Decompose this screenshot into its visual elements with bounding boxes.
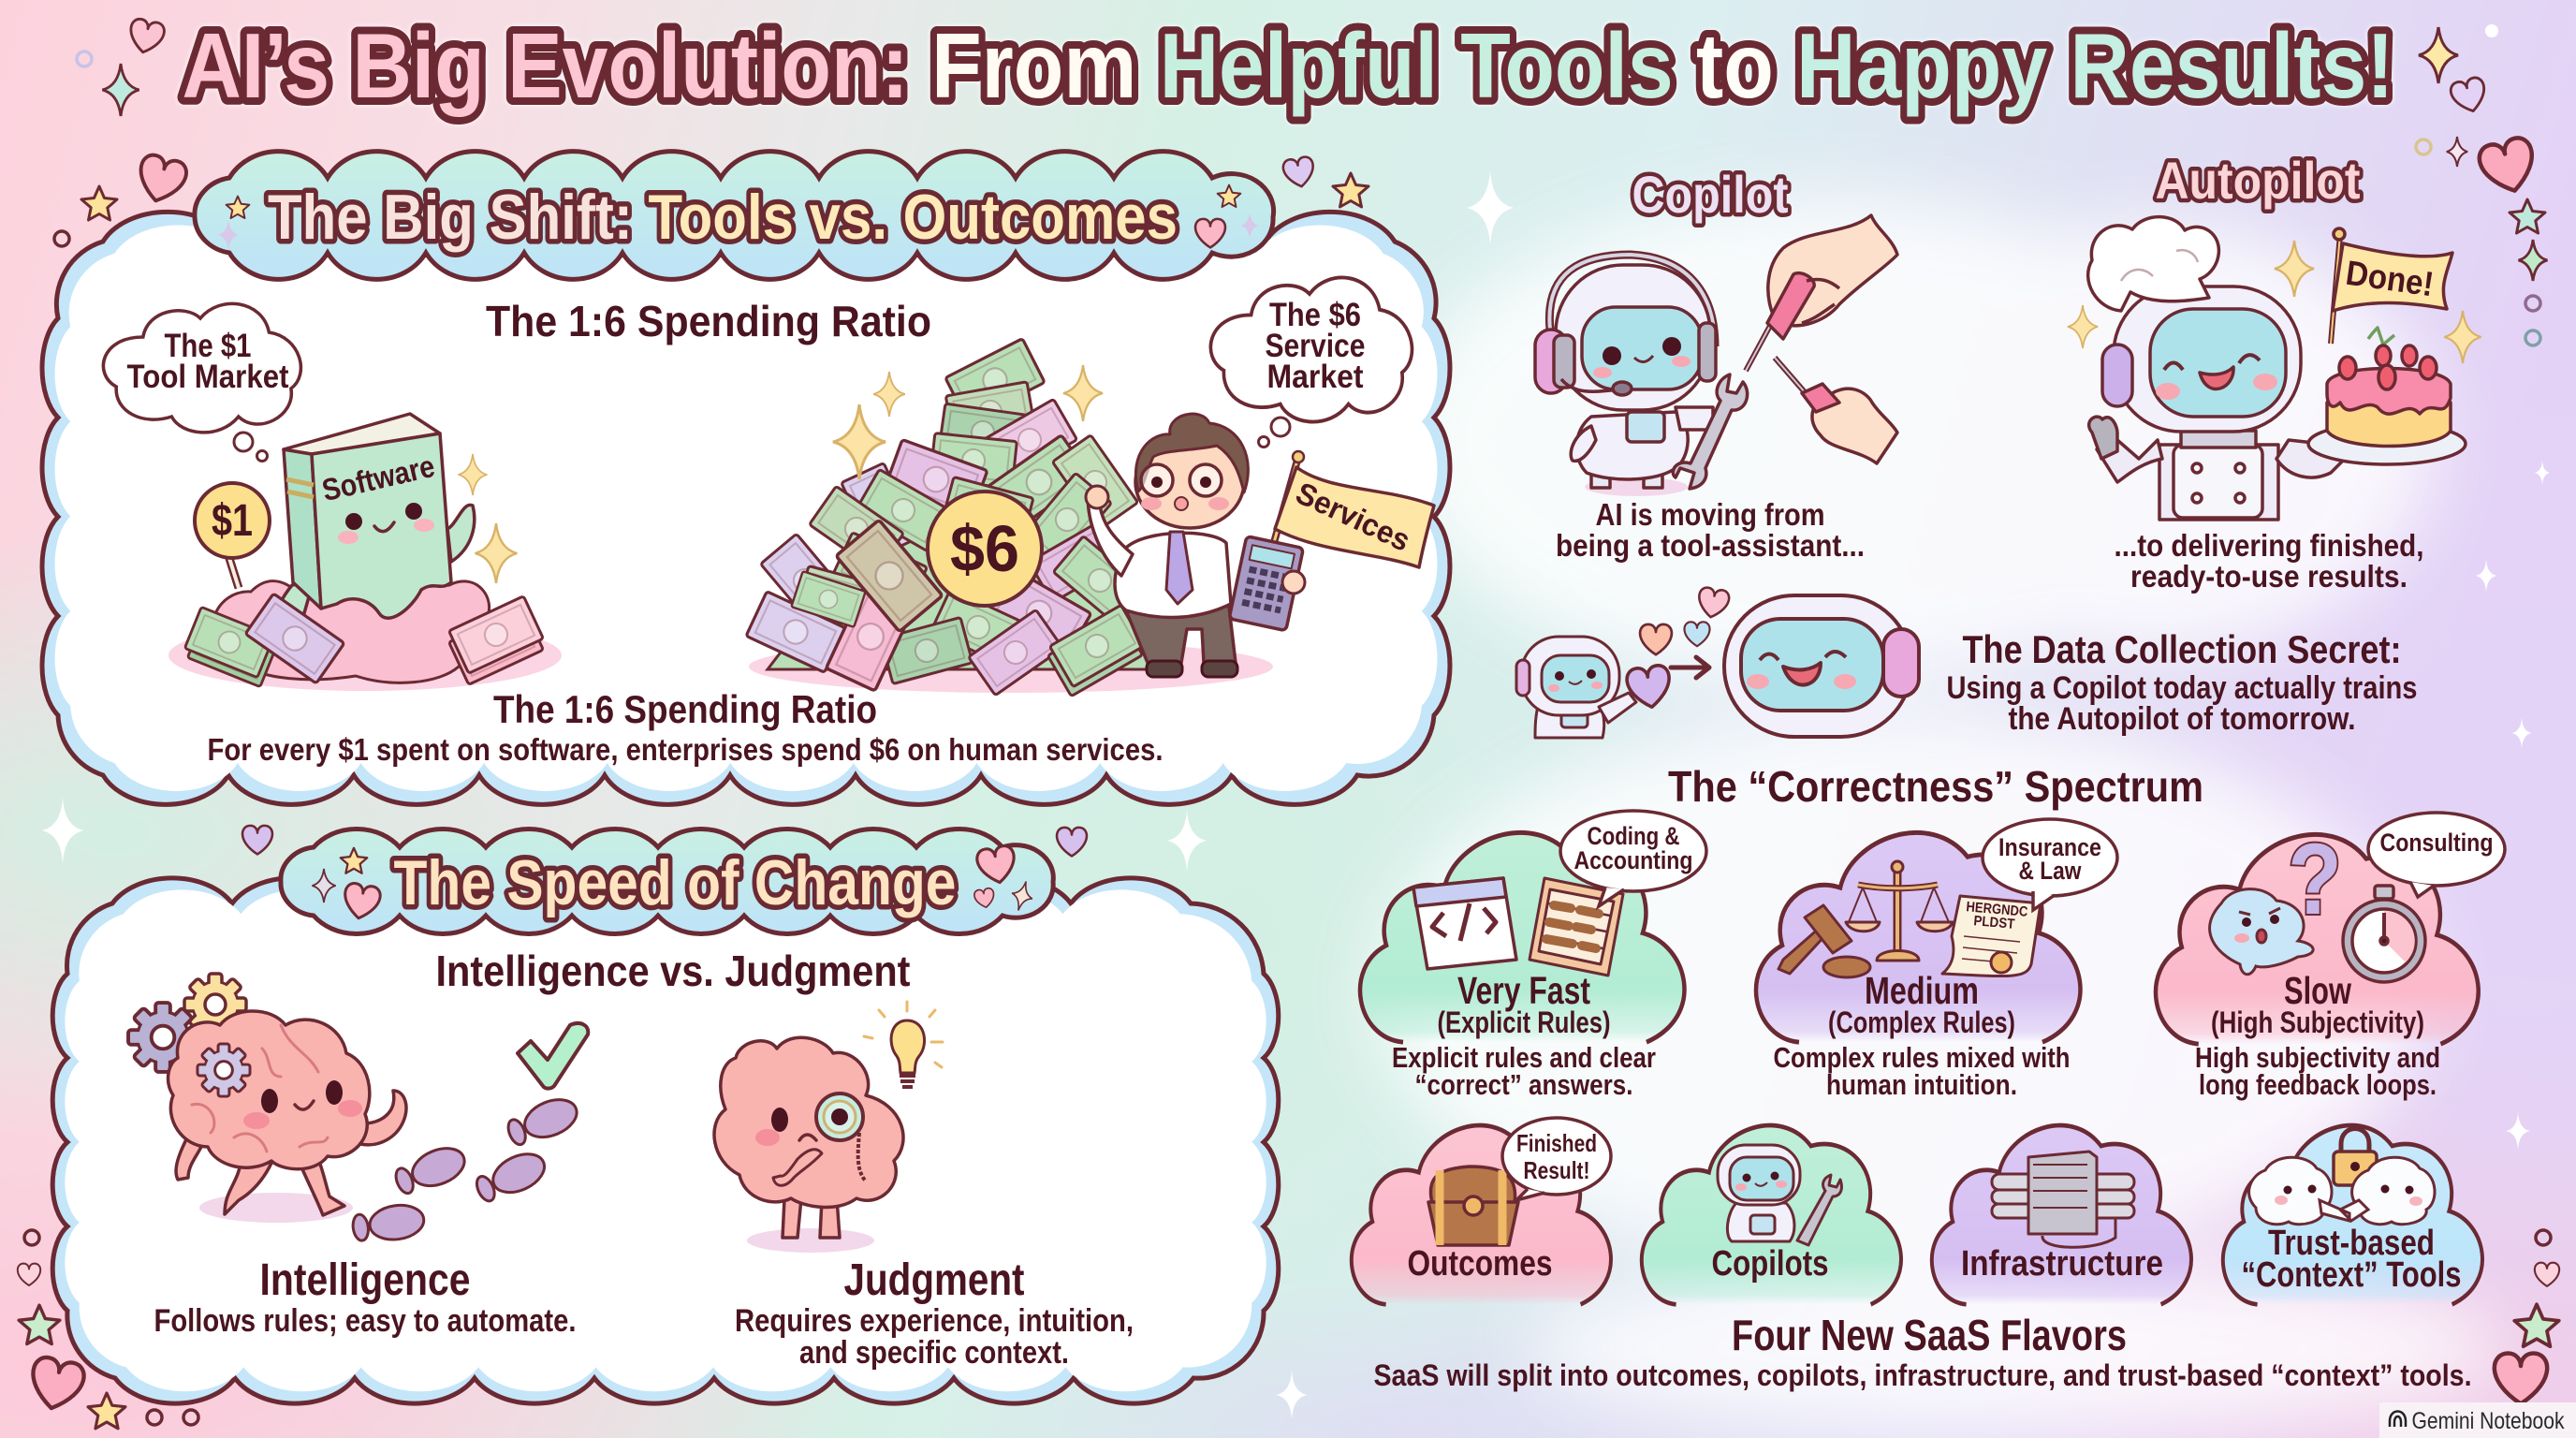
subheading: ratio: The 1:6 Spending Ratio (486, 297, 931, 345)
text: medium label: Medium (1865, 969, 1979, 1012)
flag label: done: Done! (2344, 254, 2436, 303)
text: autopilot caption: ...to delivering finished, (2114, 528, 2424, 563)
illustration: thinking brain with monocle (714, 1037, 903, 1253)
card: trust-based context tools (2223, 1125, 2482, 1304)
heading: autopilot: Autopilot (2155, 151, 2361, 210)
heading: copilot: Copilot (1632, 165, 1788, 224)
illustration: running brain with gears (128, 974, 406, 1223)
heading: correctness spectrum: The “Correctness” Spectrum (1668, 762, 2203, 811)
text: ratio explanation: For every $1 spent on software, enterprises spend $6 on human services. (208, 732, 1163, 767)
card: infrastructure (1932, 1125, 2191, 1304)
speech bubble: finished result (1502, 1118, 1611, 1200)
heading: the speed of change: The Speed of Change (393, 847, 957, 918)
thought bubble: service market (1210, 277, 1412, 448)
icon: servers (1992, 1152, 2134, 1247)
thought bubble: service market: The $6 (1269, 297, 1361, 333)
icon: two shaking clouds (2249, 1157, 2435, 1225)
scroll text: HERGNDC (1966, 899, 2028, 920)
thought bubble: tool market: Tool Market (127, 359, 289, 395)
icon: stopwatch (2343, 886, 2425, 982)
text: data collection secret: the Autopilot of tomorrow. (2009, 701, 2355, 737)
text: very fast description: Explicit rules and clear (1392, 1041, 1656, 1074)
card: medium (1756, 819, 2117, 1101)
text: copilot caption: AI is moving from (1595, 497, 1825, 532)
coin sign: $1 (195, 483, 270, 588)
icon: padlock (2334, 1129, 2377, 1185)
illustration: copilot robot with wrench (1535, 255, 1748, 496)
text: slow description: long feedback loops. (2199, 1068, 2437, 1101)
card: outcomes (1352, 1118, 1611, 1304)
text: very fast label (1438, 969, 1610, 1039)
icon: code window (1413, 878, 1516, 969)
banner: the speed of change (281, 829, 1053, 934)
icon: abacus (1530, 878, 1623, 976)
text: very fast label: (Explicit Rules) (1438, 1005, 1610, 1039)
text: ratio caption: The 1:6 Spending Ratio (493, 687, 877, 731)
card: very fast (1360, 811, 1706, 1101)
text: data collection secret: The Data Collection Secret: (1962, 627, 2402, 671)
subheading: intelligence vs judgment: Intelligence vs. Judgment (436, 946, 910, 995)
illustration: chef robot with cake (2088, 217, 2466, 520)
illustration: software book on small pile (168, 414, 562, 691)
section: autopilot (2068, 151, 2481, 594)
panel 2 cloud frame (52, 878, 1279, 1403)
text: intelligence: Follows rules; easy to automate. (154, 1303, 577, 1339)
heading: the big shift: The Big Shift: Tools vs. Outcomes (268, 182, 1178, 253)
text: very fast description: “correct” answers. (1415, 1068, 1632, 1101)
speech bubble: insurance and law: Insurance (1998, 833, 2101, 861)
text: slow label (2211, 969, 2424, 1039)
icon: check mark (518, 1023, 588, 1089)
main title: AI’s Big Evolution: From Helpful Tools to Happy Results! (182, 14, 2394, 117)
banner: the big shift (195, 152, 1274, 279)
illustration: small robot handing data (1516, 637, 1673, 738)
icon: scales of justice (1846, 861, 1953, 961)
sparkles around chef (2068, 241, 2481, 363)
thought bubble: service market: Market (1267, 359, 1364, 395)
text: autopilot caption (2114, 528, 2424, 594)
text: data collection secret (1947, 627, 2417, 737)
label: infrastructure: Infrastructure (1961, 1244, 2163, 1284)
text: slow description: High subjectivity and (2195, 1041, 2440, 1074)
icon: gavel (1778, 905, 1870, 977)
text: judgment: Judgment (844, 1255, 1025, 1305)
icon: light bulb (864, 1002, 943, 1087)
icon: confused blob (2210, 889, 2313, 975)
section: four new saas flavors (1352, 1118, 2482, 1392)
illustration: money pile (746, 339, 1273, 697)
label: software: Software (319, 448, 438, 507)
speech bubble: insurance and law: & Law (2018, 857, 2082, 885)
label: trust-based context tools (2241, 1224, 2462, 1295)
label: copilots: Copilots (1711, 1244, 1829, 1284)
text: medium description: Complex rules mixed with (1773, 1041, 2071, 1074)
panel: the big shift (42, 152, 1450, 804)
speech bubble: consulting: Consulting (2379, 829, 2494, 857)
text: medium description (1773, 1041, 2071, 1101)
scroll text: PLDST (1973, 913, 2015, 932)
icon: mini robot (1718, 1145, 1841, 1245)
text: judgment (735, 1255, 1134, 1371)
card: copilots (1642, 1125, 1901, 1304)
speech bubble: consulting (2368, 813, 2505, 897)
label: outcomes: Outcomes (1408, 1244, 1552, 1284)
section: data collection secret (1516, 586, 2417, 738)
coin: $6: $6 (950, 512, 1019, 585)
watermark: gemini notebook (2379, 1402, 2576, 1438)
speech bubble: coding and accounting (1560, 811, 1706, 906)
illustration: businessman with calculator and flag (1086, 414, 1434, 677)
coin: $6 (928, 492, 1042, 606)
card: slow (2156, 813, 2505, 1101)
speech bubble: finished result: Finished (1516, 1129, 1597, 1157)
section: copilot (1535, 165, 1897, 563)
illustration: human hands with screwdrivers (1746, 215, 1897, 463)
text: judgment: Requires experience, intuition, (735, 1303, 1134, 1339)
speech bubble: insurance and law (1983, 819, 2117, 910)
label: trust-based context tools: “Context” Tools (2241, 1255, 2462, 1295)
text: medium description: human intuition. (1826, 1068, 2017, 1101)
text: slow label: (High Subjectivity) (2211, 1005, 2424, 1039)
text: very fast label: Very Fast (1457, 969, 1590, 1012)
flag label: services: Services (1291, 475, 1415, 558)
text: judgment: and specific context. (799, 1335, 1069, 1371)
thought bubble: tool market (103, 303, 300, 461)
panel 1 cloud frame (42, 212, 1450, 804)
text: very fast description (1392, 1041, 1656, 1101)
scroll text (1966, 899, 2028, 932)
speech bubble: coding and accounting: Coding & (1588, 822, 1679, 850)
label: trust-based context tools: Trust-based (2268, 1224, 2435, 1263)
text: medium label (1828, 969, 2015, 1039)
speech bubble: coding and accounting: Accounting (1574, 846, 1692, 874)
icons: floating hearts (1640, 586, 1731, 654)
text: slow label: Slow (2284, 969, 2351, 1012)
icon: footprints (351, 1093, 582, 1245)
thought bubble: tool market: The $1 (165, 328, 251, 364)
speech bubble: finished result: Result! (1524, 1156, 1589, 1184)
text: medium label: (Complex Rules) (1828, 1005, 2015, 1039)
text: intelligence (154, 1255, 577, 1339)
text: saas split description: SaaS will split into outcomes, copilots, infrastructure, and trust-based “context” tools. (1374, 1358, 2471, 1392)
text: copilot caption: being a tool-assistant... (1556, 528, 1865, 563)
text: copilot caption (1556, 497, 1865, 563)
panel: the speed of change (52, 829, 1279, 1403)
icon: arrow (1671, 657, 1709, 678)
section: correctness spectrum (1360, 762, 2505, 1101)
text: data collection secret: Using a Copilot today actually trains (1947, 670, 2417, 706)
text: intelligence: Intelligence (260, 1255, 470, 1305)
text: autopilot caption: ready-to-use results. (2130, 559, 2408, 594)
heading: four new saas flavors: Four New SaaS Flavors (1732, 1311, 2127, 1359)
icon: document scroll (1942, 896, 2041, 976)
thought bubble: service market: Service (1266, 328, 1365, 364)
icon: treasure chest (1428, 1167, 1518, 1245)
text: slow description (2195, 1041, 2440, 1101)
illustration: big robot head (1724, 595, 1919, 737)
coin sign: $1: $1 (212, 496, 253, 546)
icon: question mark: ? (2288, 822, 2342, 935)
